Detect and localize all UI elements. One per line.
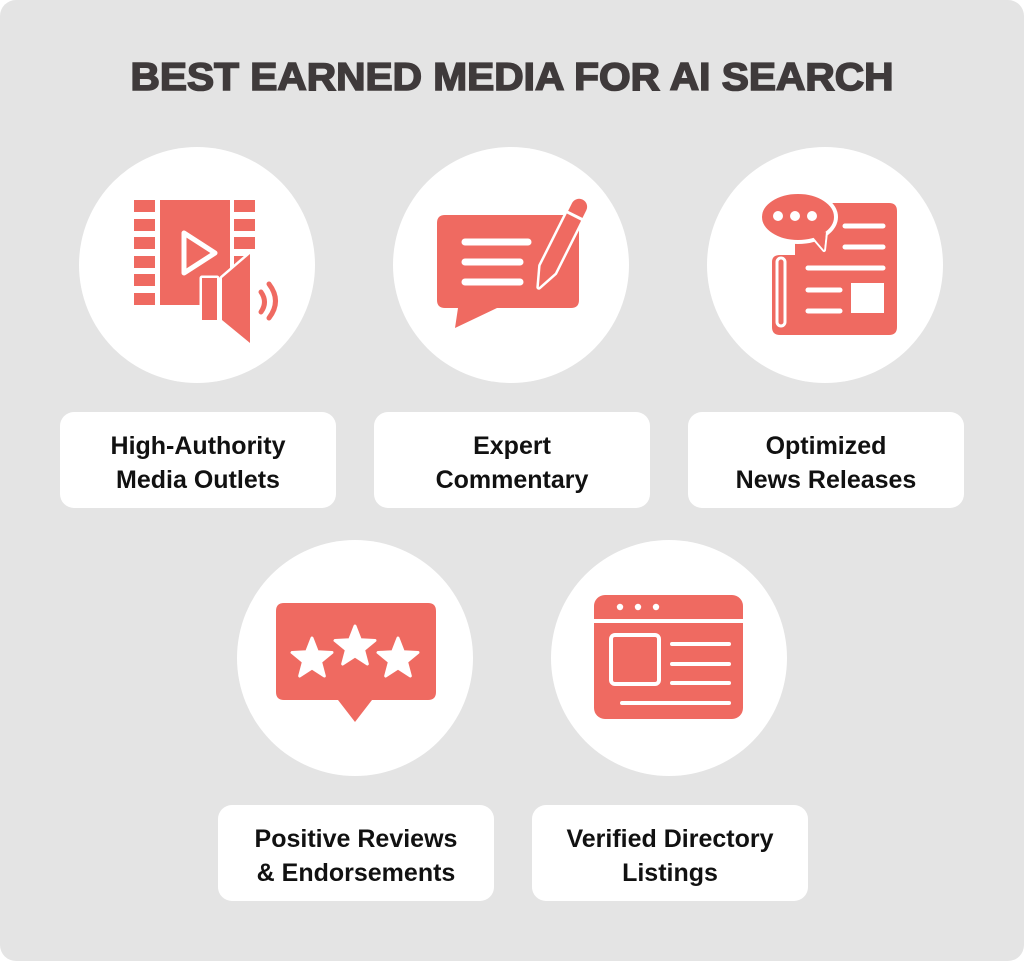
label text: & Endorsements [257,859,455,887]
label text: High-Authority [111,432,286,460]
icon: star rating bubble [276,603,436,722]
icon circle: commentary [393,147,629,383]
label box [688,412,964,508]
label text: Positive Reviews [255,825,457,853]
icon circle: directory [551,540,787,776]
icon: browser window [594,595,743,719]
label text: News Releases [736,466,916,494]
icon: newspaper with chat bubble [760,192,897,335]
label text: Media Outlets [116,466,280,494]
item: optimized news releases [688,147,964,508]
item: high-authority media outlets [60,147,336,508]
icon: film with speaker [134,200,276,343]
label text: Commentary [436,466,589,494]
icon circle: media [79,147,315,383]
label text: Expert [473,432,552,460]
item: expert commentary [374,147,650,508]
item: positive reviews [218,540,494,901]
label box [532,805,808,901]
label text: Verified Directory [566,825,774,853]
label box [374,412,650,508]
icon circle: news [707,147,943,383]
label box [60,412,336,508]
icon: speech bubble with pencil [437,196,591,328]
title: BEST EARNED MEDIA FOR AI SEARCH [130,56,894,99]
item: verified directory listings [532,540,808,901]
label text: Optimized [766,432,886,460]
icon circle: reviews [237,540,473,776]
label box [218,805,494,901]
label text: Listings [622,859,718,887]
